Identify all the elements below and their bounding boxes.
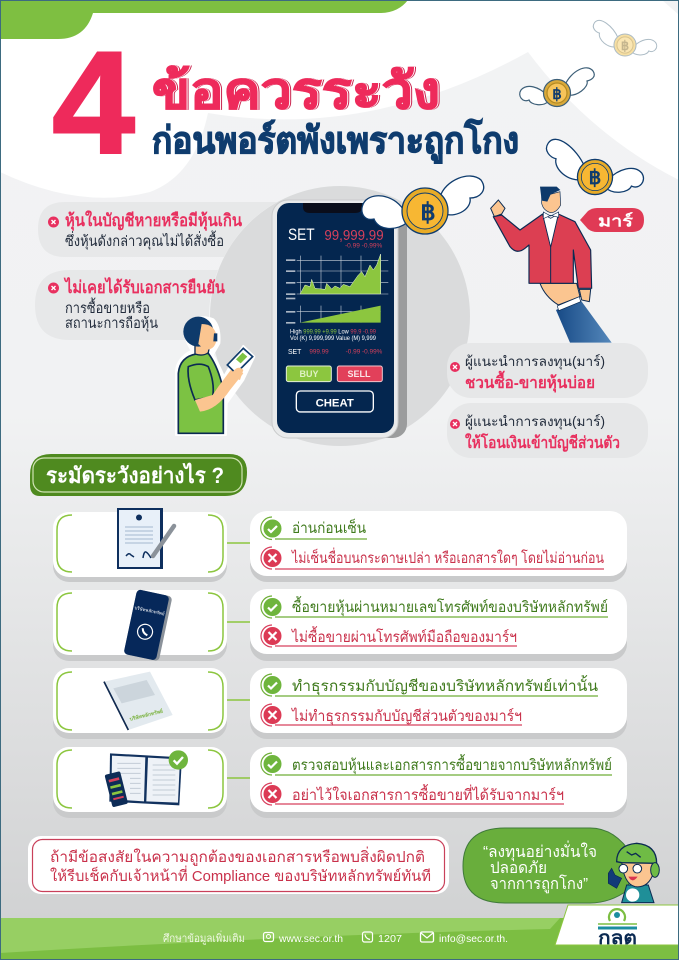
- SEC logo panel: [555, 905, 679, 949]
- warning one: หุ้นในบัญชีหายหรือมีหุ้นเกิน: [65, 210, 242, 231]
- warning one: ซึ่งหุ้นดังกล่าวคุณไม่ได้สั่งซื้อ: [65, 230, 224, 250]
- footer contact info: 1207: [378, 933, 402, 945]
- warning three: ชวนซื้อ-ขายหุ้นบ่อย: [465, 370, 595, 393]
- footer contact info: info@sec.or.th.: [439, 933, 508, 945]
- warning two: [35, 270, 225, 340]
- flying coin small: [593, 20, 657, 56]
- top green banner: [0, 0, 408, 39]
- price chart: [286, 254, 388, 295]
- right warning bubbles: [447, 343, 648, 458]
- do item: [261, 753, 612, 775]
- icon: mobile phone call: [124, 589, 172, 661]
- warning two: ไม่เคยได้รับเอกสารยืนยัน: [63, 277, 225, 297]
- SET index heading: -0.99 -0.99%: [345, 243, 383, 249]
- quote bubble: จากการถูกโกง”: [490, 874, 588, 894]
- market stats: SET: [288, 347, 302, 356]
- title: [52, 21, 519, 184]
- market stats: [288, 329, 383, 356]
- investor figure with phone: [176, 317, 254, 435]
- section heading: [30, 454, 247, 496]
- warning four: ให้โอนเงินเข้าบัญชีส่วนตัว: [465, 432, 620, 453]
- scammer figure in red jacket: [491, 187, 612, 343]
- smartphone: [272, 200, 407, 438]
- warning four: [447, 403, 648, 458]
- don't item: ไม่เซ็นชื่อบนกระดาษเปล่า หรือเอกสารใดๆ โดยไม่อ่านก่อน: [291, 547, 604, 567]
- do item: ตรวจสอบหุ้นและเอกสารการซื้อขายจากบริษัทหลักทรัพย์: [292, 754, 612, 775]
- do item: ซื้อขายหุ้นผ่านหมายเลขโทรศัพท์ของบริษัทหลักทรัพย์: [292, 596, 608, 617]
- don't item: ไม่ซื้อขายผ่านโทรศัพท์มือถือของมาร์ฯ: [291, 626, 517, 646]
- do item: อ่านก่อนเซ็น: [292, 518, 366, 537]
- bottom callout: [28, 836, 449, 894]
- buy button: [286, 366, 331, 382]
- row one: document illustration card: [53, 508, 250, 582]
- cheat button: [296, 391, 373, 412]
- market stats: High 999.99 +9.99 Low 99.9 -0.99: [290, 329, 377, 335]
- warning two: การซื้อขายหรือ: [65, 297, 150, 317]
- label: scammer tag: มาร์: [598, 212, 634, 230]
- phone screen content: [286, 225, 388, 412]
- warning three: ผู้แนะนำการลงทุน(มาร์): [465, 353, 605, 370]
- don't item: [261, 783, 564, 805]
- icon: bank account book: [104, 672, 173, 730]
- label: scammer tag: [580, 208, 644, 232]
- bottom callout: ให้รีบเช็คกับเจ้าหน้าที่ Compliance ของบริษัทหลักทรัพย์ทันที: [50, 865, 431, 885]
- flying coin large: ฿: [420, 199, 436, 226]
- quote bubble: “ลงทุนอย่างมั่นใจ: [483, 840, 597, 862]
- don't item: ไม่ทำธุรกรรมกับบัญชีส่วนตัวของมาร์ฯ: [291, 707, 522, 726]
- flying coin medium: [520, 68, 594, 106]
- market stats: Vol (K) 9,999,999 Value (M) 9,999: [290, 336, 377, 342]
- row four: records illustration card: [53, 747, 250, 818]
- don't item: [261, 625, 517, 647]
- icon: mobile phone call: บริษัทหลักทรัพย์: [134, 604, 166, 616]
- SET index heading: 99,999.99: [324, 228, 384, 244]
- title line two: ก่อนพอร์ตพังเพราะถูกโกง: [152, 118, 519, 164]
- flying coin small: ฿: [621, 38, 629, 53]
- warning three: [447, 343, 648, 398]
- icon: signed document: [117, 508, 174, 569]
- don't item: [261, 547, 604, 569]
- icon: bank account book: บริษัทหลักทรัพย์: [129, 708, 164, 723]
- row three: bank book illustration card: [53, 668, 250, 739]
- flying coin upper right: ฿: [589, 167, 601, 189]
- SET index heading: [288, 225, 384, 249]
- big circle behind phone: [210, 186, 470, 446]
- footer contact info: ศึกษาข้อมูลเพิ่มเติม: [163, 930, 245, 945]
- left warning bubbles: [35, 202, 277, 340]
- footer contact info: www.sec.or.th: [278, 933, 343, 945]
- do item: [261, 674, 598, 696]
- buy button: BUY: [300, 369, 318, 379]
- warning two: สถานะการถือหุ้น: [65, 315, 158, 332]
- flying coin medium: ฿: [552, 86, 562, 103]
- market stats: 999.99: [309, 349, 329, 356]
- cheat button: CHEAT: [316, 397, 354, 409]
- flying coin large: [362, 176, 484, 234]
- footer band: [0, 918, 679, 960]
- bottom callout: ถ้ามีข้อสงสัยในความถูกต้องของเอกสารหรือพบสิ่งผิดปกติ: [50, 846, 425, 866]
- mascot: [608, 843, 659, 903]
- market stats: -0.99 -0.99%: [346, 349, 383, 356]
- row one: advice card: [250, 511, 627, 582]
- row two: advice card: [250, 589, 627, 661]
- warning four: ผู้แนะนำการลงทุน(มาร์): [465, 413, 605, 430]
- volume chart: [286, 298, 381, 324]
- do item: ทำธุรกรรมกับบัญชีของบริษัทหลักทรัพย์เท่านั้น: [292, 675, 598, 696]
- SET index heading: SET: [288, 225, 315, 244]
- title line one: ข้อควรระวัง: [152, 63, 440, 119]
- section heading: ระมัดระวังอย่างไร ?: [46, 462, 224, 488]
- flying coin upper right: [546, 139, 643, 195]
- logo mark: กลต: [598, 928, 637, 949]
- sell button: [337, 366, 382, 382]
- numeral 4: 4: [52, 21, 135, 184]
- row four: advice card: [250, 747, 627, 818]
- row three: advice card: [250, 668, 627, 739]
- footer contact info: [163, 930, 508, 945]
- row two: phone illustration card: [53, 589, 250, 661]
- quote bubble: [463, 828, 632, 903]
- sell button: SELL: [348, 369, 371, 379]
- don't item: อย่าไว้ใจเอกสารการซื้อขายที่ได้รับจากมาร์ฯ: [292, 784, 564, 804]
- do item: [261, 596, 608, 618]
- warning one: [38, 202, 277, 257]
- do item: [261, 517, 367, 540]
- quote bubble: ปลอดภัย: [490, 860, 547, 877]
- don't item: [261, 704, 522, 726]
- icon: open record book with phone: [105, 750, 188, 807]
